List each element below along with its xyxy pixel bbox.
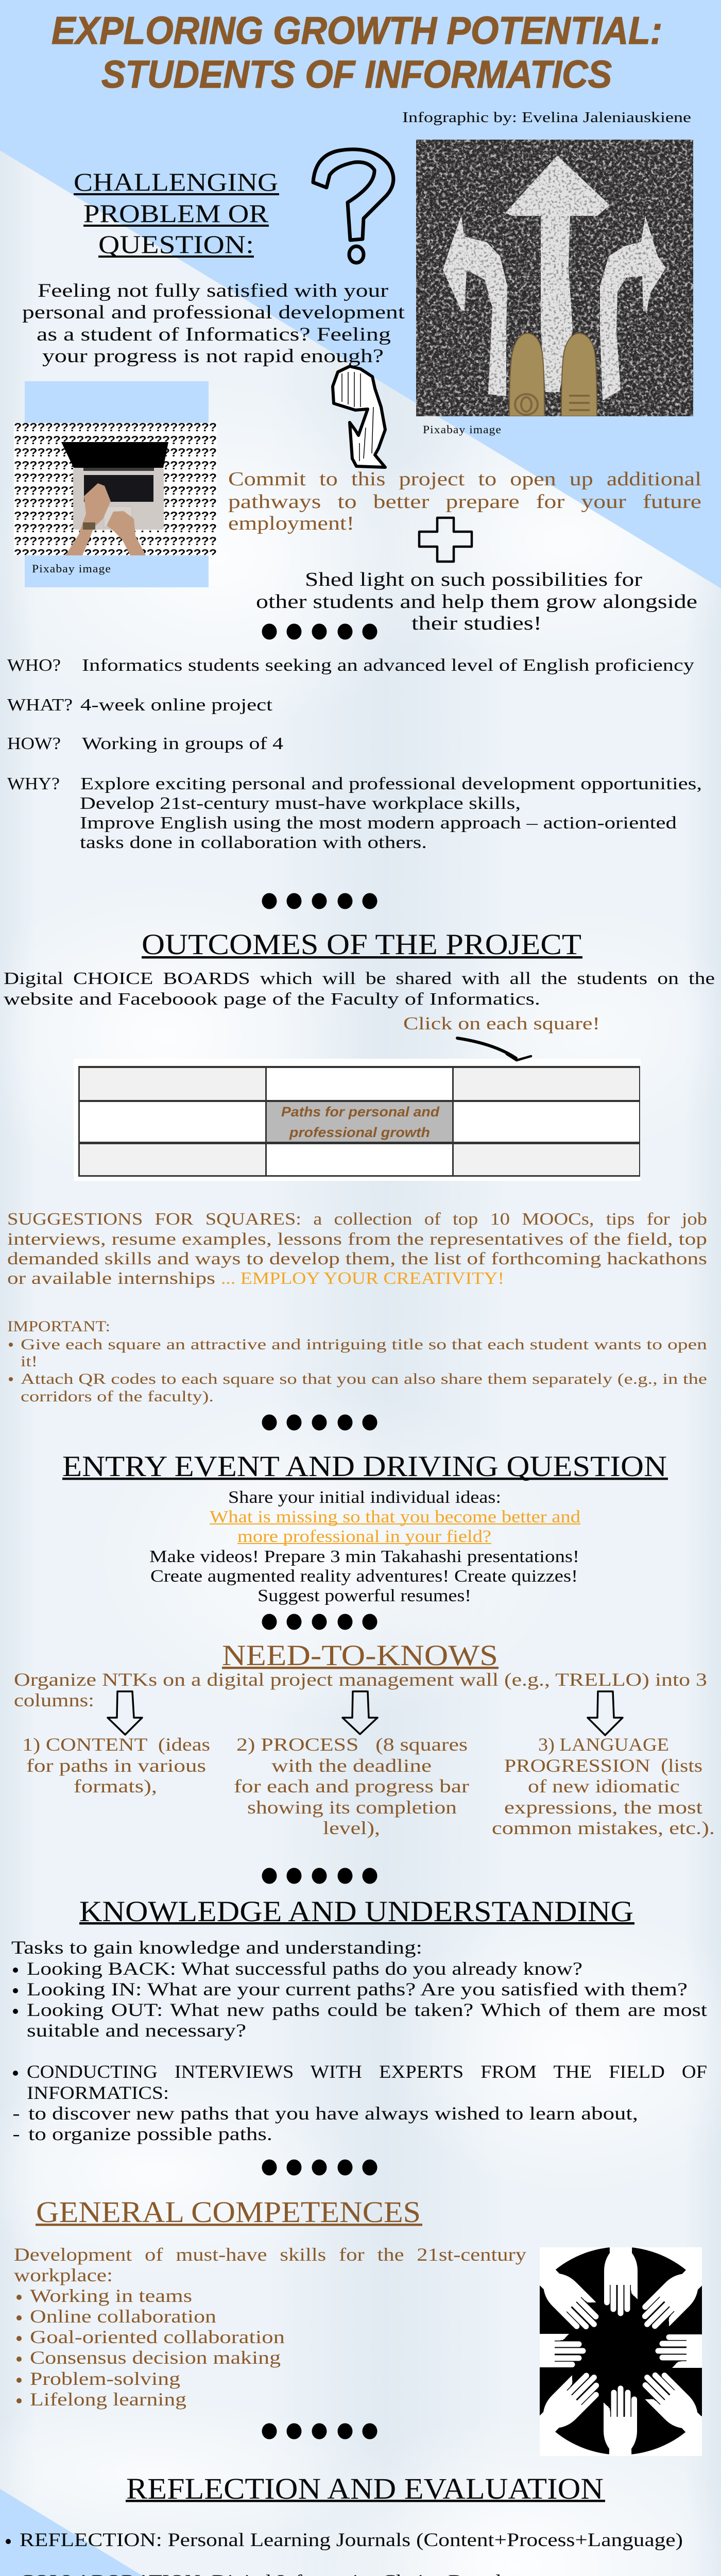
heading: challenging problem or question: QUESTION: (98, 230, 254, 259)
what (7, 696, 273, 715)
text: entry event (149, 1488, 580, 1605)
heading: challenging problem or question: CHALLENGING (74, 167, 278, 196)
center cell text (281, 1104, 440, 1140)
text: tasks: suitable and necessary? (27, 2020, 246, 2041)
bottom blue triangle (0, 2489, 384, 2576)
row 3 (80, 1144, 639, 1175)
what: 4-week online project (80, 696, 273, 715)
text: tasks: Looking OUT: What new paths could be taken? Which of them are most (27, 1999, 707, 2020)
text: suggestions for squares: or available internships (7, 1269, 215, 1288)
text: organize ntks: Organize NTKs on a digital project management wall (e.g., TRELLO) into 3 (14, 1669, 707, 1690)
text: interviews: CONDUCTING INTERVIEWS WITH EXPERTS FROM THE FIELD OF (27, 2061, 707, 2082)
text: interviews: INFORMATICS: (27, 2082, 169, 2103)
question mark pattern: ?????????????????????????? (14, 471, 217, 484)
text: competences list: Development of must-have skills for the 21st-century (14, 2244, 526, 2265)
center cell text: Paths for personal and (281, 1104, 440, 1120)
text: tasks: Looking IN: What are your current paths? Are you satisfied with them? (27, 1979, 688, 1999)
why: Improve English using the most modern approach – action-oriented (80, 814, 677, 833)
column: content: 1) CONTENT (ideas (22, 1734, 210, 1755)
text: entry event: Make videos! Prepare 3 min Takahashi presentations! (149, 1547, 579, 1566)
driving question: more professional in your field? (237, 1527, 491, 1546)
row 1 (80, 1068, 639, 1100)
column: process: level), (323, 1818, 380, 1838)
column: language progression: 3) LANGUAGE (538, 1734, 669, 1755)
text: suggestions for squares: interviews, resume examples, lessons from the representatives of the field, top (7, 1230, 707, 1249)
divider dots (262, 1614, 377, 1630)
text: important notes: corridors of the faculty). (21, 1388, 214, 1405)
text: important notes: Give each square an attractive and intriguing title so that each student wants to open (21, 1336, 707, 1353)
text: commit call to action: Commit to this project to open up additional (228, 468, 701, 490)
text: competences list: Online collaboration (30, 2306, 216, 2327)
text: interviews (13, 2061, 707, 2144)
question mark pattern: ?????????????????????????? (14, 459, 217, 472)
heading: entry event and driving question: ENTRY EVENT AND DRIVING QUESTION (62, 1450, 667, 1483)
text: digital choice boards: Digital CHOICE BOARDS which will be shared with all the students on the (4, 969, 715, 988)
title (52, 9, 662, 96)
column: content: formats), (74, 1776, 157, 1797)
divider dots (262, 1868, 377, 1884)
divider dots (262, 623, 377, 640)
icon: plus sign (419, 518, 472, 562)
text: entry event: Share your initial individual ideas: (228, 1488, 501, 1507)
column: content (22, 1734, 210, 1797)
text: interviews: to organize possible paths. (28, 2124, 272, 2144)
text: commit call to action (228, 468, 701, 534)
question mark pattern (14, 420, 217, 560)
heading: general competences: GENERAL COMPETENCES (36, 2195, 421, 2229)
text: competences list: Working in teams (30, 2285, 192, 2306)
author credit: Infographic by: Evelina Jaleniauskiene (402, 110, 691, 126)
text: interviews: to discover new paths that you have always wished to learn about, (28, 2103, 638, 2124)
why (7, 774, 702, 852)
text: commit call to action: pathways to better prepare for your future (228, 491, 701, 513)
text: opening question: Feeling not fully satisfied with your (38, 280, 388, 301)
row 2 (80, 1102, 639, 1142)
heading: reflection and evaluation: REFLECTION AND EVALUATION (126, 2472, 604, 2505)
how: HOW? (7, 734, 61, 753)
heading: outcomes of the project: OUTCOMES OF THE PROJECT (142, 928, 581, 961)
driving question: What is missing so that you become better and (210, 1507, 580, 1527)
text: shed light: Shed light on such possibilities for (305, 569, 642, 590)
text: important notes: IMPORTANT: (7, 1318, 110, 1335)
text: competences list: Goal-oriented collaboration (30, 2327, 285, 2347)
text: tasks: Tasks to gain knowledge and understanding: (11, 1937, 422, 1958)
column: process: for each and progress bar (234, 1776, 469, 1797)
column: process (234, 1734, 469, 1838)
divider dots (262, 2160, 377, 2175)
question mark pattern: ?????????????????????????? (14, 446, 217, 459)
column: language progression: PROGRESSION (lists (504, 1755, 702, 1776)
column: process: 2) PROCESS (8 squares (236, 1734, 468, 1755)
text: suggestions for squares: demanded skills and ways to develop them, the list of forthcoming hackathons (7, 1249, 707, 1268)
text: shed light: other students and help them grow alongside (256, 591, 697, 613)
text: important notes (7, 1318, 707, 1405)
icon: down arrow 3 (588, 1691, 623, 1735)
laptop (61, 442, 168, 555)
text: tasks: Looking BACK: What successful paths do you already know? (27, 1958, 582, 1979)
image: road arrows and shoes (416, 140, 693, 416)
text: organize ntks (14, 1669, 707, 1710)
text: opening question: as a student of Informatics? Feeling (37, 324, 391, 345)
heading: need-to-knows: NEED-TO-KNOWS (222, 1639, 498, 1672)
column: language progression: of new idiomatic (528, 1776, 680, 1797)
question mark pattern: ?????????????????????????? (14, 547, 217, 560)
why: Develop 21st-century must-have workplace skills, (80, 794, 521, 813)
column: language progression (492, 1734, 715, 1838)
text: opening question: your progress is not rapid enough? (42, 346, 384, 367)
how (7, 734, 283, 753)
text: organize ntks: columns: (14, 1690, 94, 1710)
text: suggestions for squares (7, 1210, 707, 1288)
divider dots (262, 1415, 377, 1430)
center cell text: professional growth (289, 1125, 430, 1140)
text: suggestions for squares: SUGGESTIONS FOR SQUARES: a collection of top 10 MOOCs, tips for job (7, 1210, 707, 1229)
how: Working in groups of 4 (82, 734, 283, 753)
divider dots (262, 893, 377, 909)
text: entry event: Create augmented reality adventures! Create quizzes! (150, 1567, 578, 1586)
text: shed light: their studies! (411, 613, 542, 634)
question mark pattern: ?????????????????????????? (14, 433, 217, 447)
text: digital choice boards: website and Faceboook page of the Faculty of Informatics. (4, 990, 540, 1009)
image: eight hands in a circle (540, 2247, 702, 2456)
icon: down arrow 1 (108, 1691, 142, 1735)
driving question (210, 1507, 580, 1546)
question mark pattern: ?????????????????????????? (14, 420, 217, 434)
why: tasks done in collaboration with others. (80, 833, 427, 852)
text: suggestions for squares: ... EMPLOY YOUR CREATIVITY! (221, 1269, 504, 1288)
why: WHY? (7, 774, 60, 793)
text: opening question (22, 280, 405, 367)
icon: down arrow 2 (342, 1691, 377, 1734)
arrow: to the table (457, 1038, 531, 1060)
top blue triangle (0, 0, 721, 588)
text: entry event: Suggest powerful resumes! (258, 1586, 471, 1605)
text: competences list: Problem-solving (30, 2368, 180, 2389)
who: WHO? (7, 656, 61, 675)
text: competences list: Consensus decision making (30, 2347, 281, 2368)
title: STUDENTS OF INFORMATICS (101, 53, 612, 96)
heading: challenging problem or question: PROBLEM OR (83, 199, 269, 228)
text: important notes: Attach QR codes to each square so that you can also share them separately (e.g., in the (21, 1370, 707, 1387)
panel: laptop image on blue (14, 381, 217, 587)
title: EXPLORING GROWTH POTENTIAL: (52, 9, 662, 52)
text: tasks (11, 1937, 707, 2041)
caption: laptop image: Pixabay image (32, 562, 111, 575)
question mark pattern: ?????????????????????????? (14, 534, 217, 548)
icon: curved sketch arrow (333, 366, 385, 467)
caption: road image: Pixabay image (423, 423, 502, 436)
icon: question mark (313, 149, 393, 263)
what: WHAT? (7, 696, 73, 715)
text: competences list (14, 2244, 526, 2410)
text: reflection: REFLECTION: Personal Learning Journals (Content+Process+Language) (20, 2530, 683, 2551)
question mark pattern: ?????????????????????????? (14, 509, 217, 522)
question mark pattern: ?????????????????????????? (14, 484, 217, 497)
column: language progression: common mistakes, etc.). (492, 1818, 715, 1838)
text: opening question: personal and professional development (22, 302, 405, 323)
choice board table (74, 1059, 641, 1181)
text: commit call to action: employment! (228, 513, 354, 534)
text: competences list: workplace: (14, 2265, 113, 2285)
text: who what how why (7, 656, 702, 852)
column: language progression: expressions, the most (504, 1797, 702, 1818)
heading: challenging problem or question (74, 167, 279, 259)
question mark pattern: ?????????????????????????? (14, 521, 217, 535)
heading: knowledge and understanding: KNOWLEDGE AND UNDERSTANDING (79, 1895, 633, 1928)
text: shed light (256, 569, 697, 634)
column: process: with the deadline (271, 1755, 432, 1776)
who: Informatics students seeking an advanced level of English proficiency (82, 656, 694, 675)
text: important notes: it! (21, 1353, 38, 1370)
column: content: for paths in various (26, 1755, 206, 1776)
question mark pattern: ?????????????????????????? (14, 496, 217, 510)
column: process: showing its completion (247, 1797, 457, 1818)
why: Explore exciting personal and professional development opportunities, (80, 774, 702, 793)
text: digital choice boards (4, 969, 715, 1009)
text: competences list: Lifelong learning (30, 2389, 186, 2410)
divider dots (262, 2424, 377, 2439)
text: click on each square: Click on each square! (403, 1013, 600, 1033)
